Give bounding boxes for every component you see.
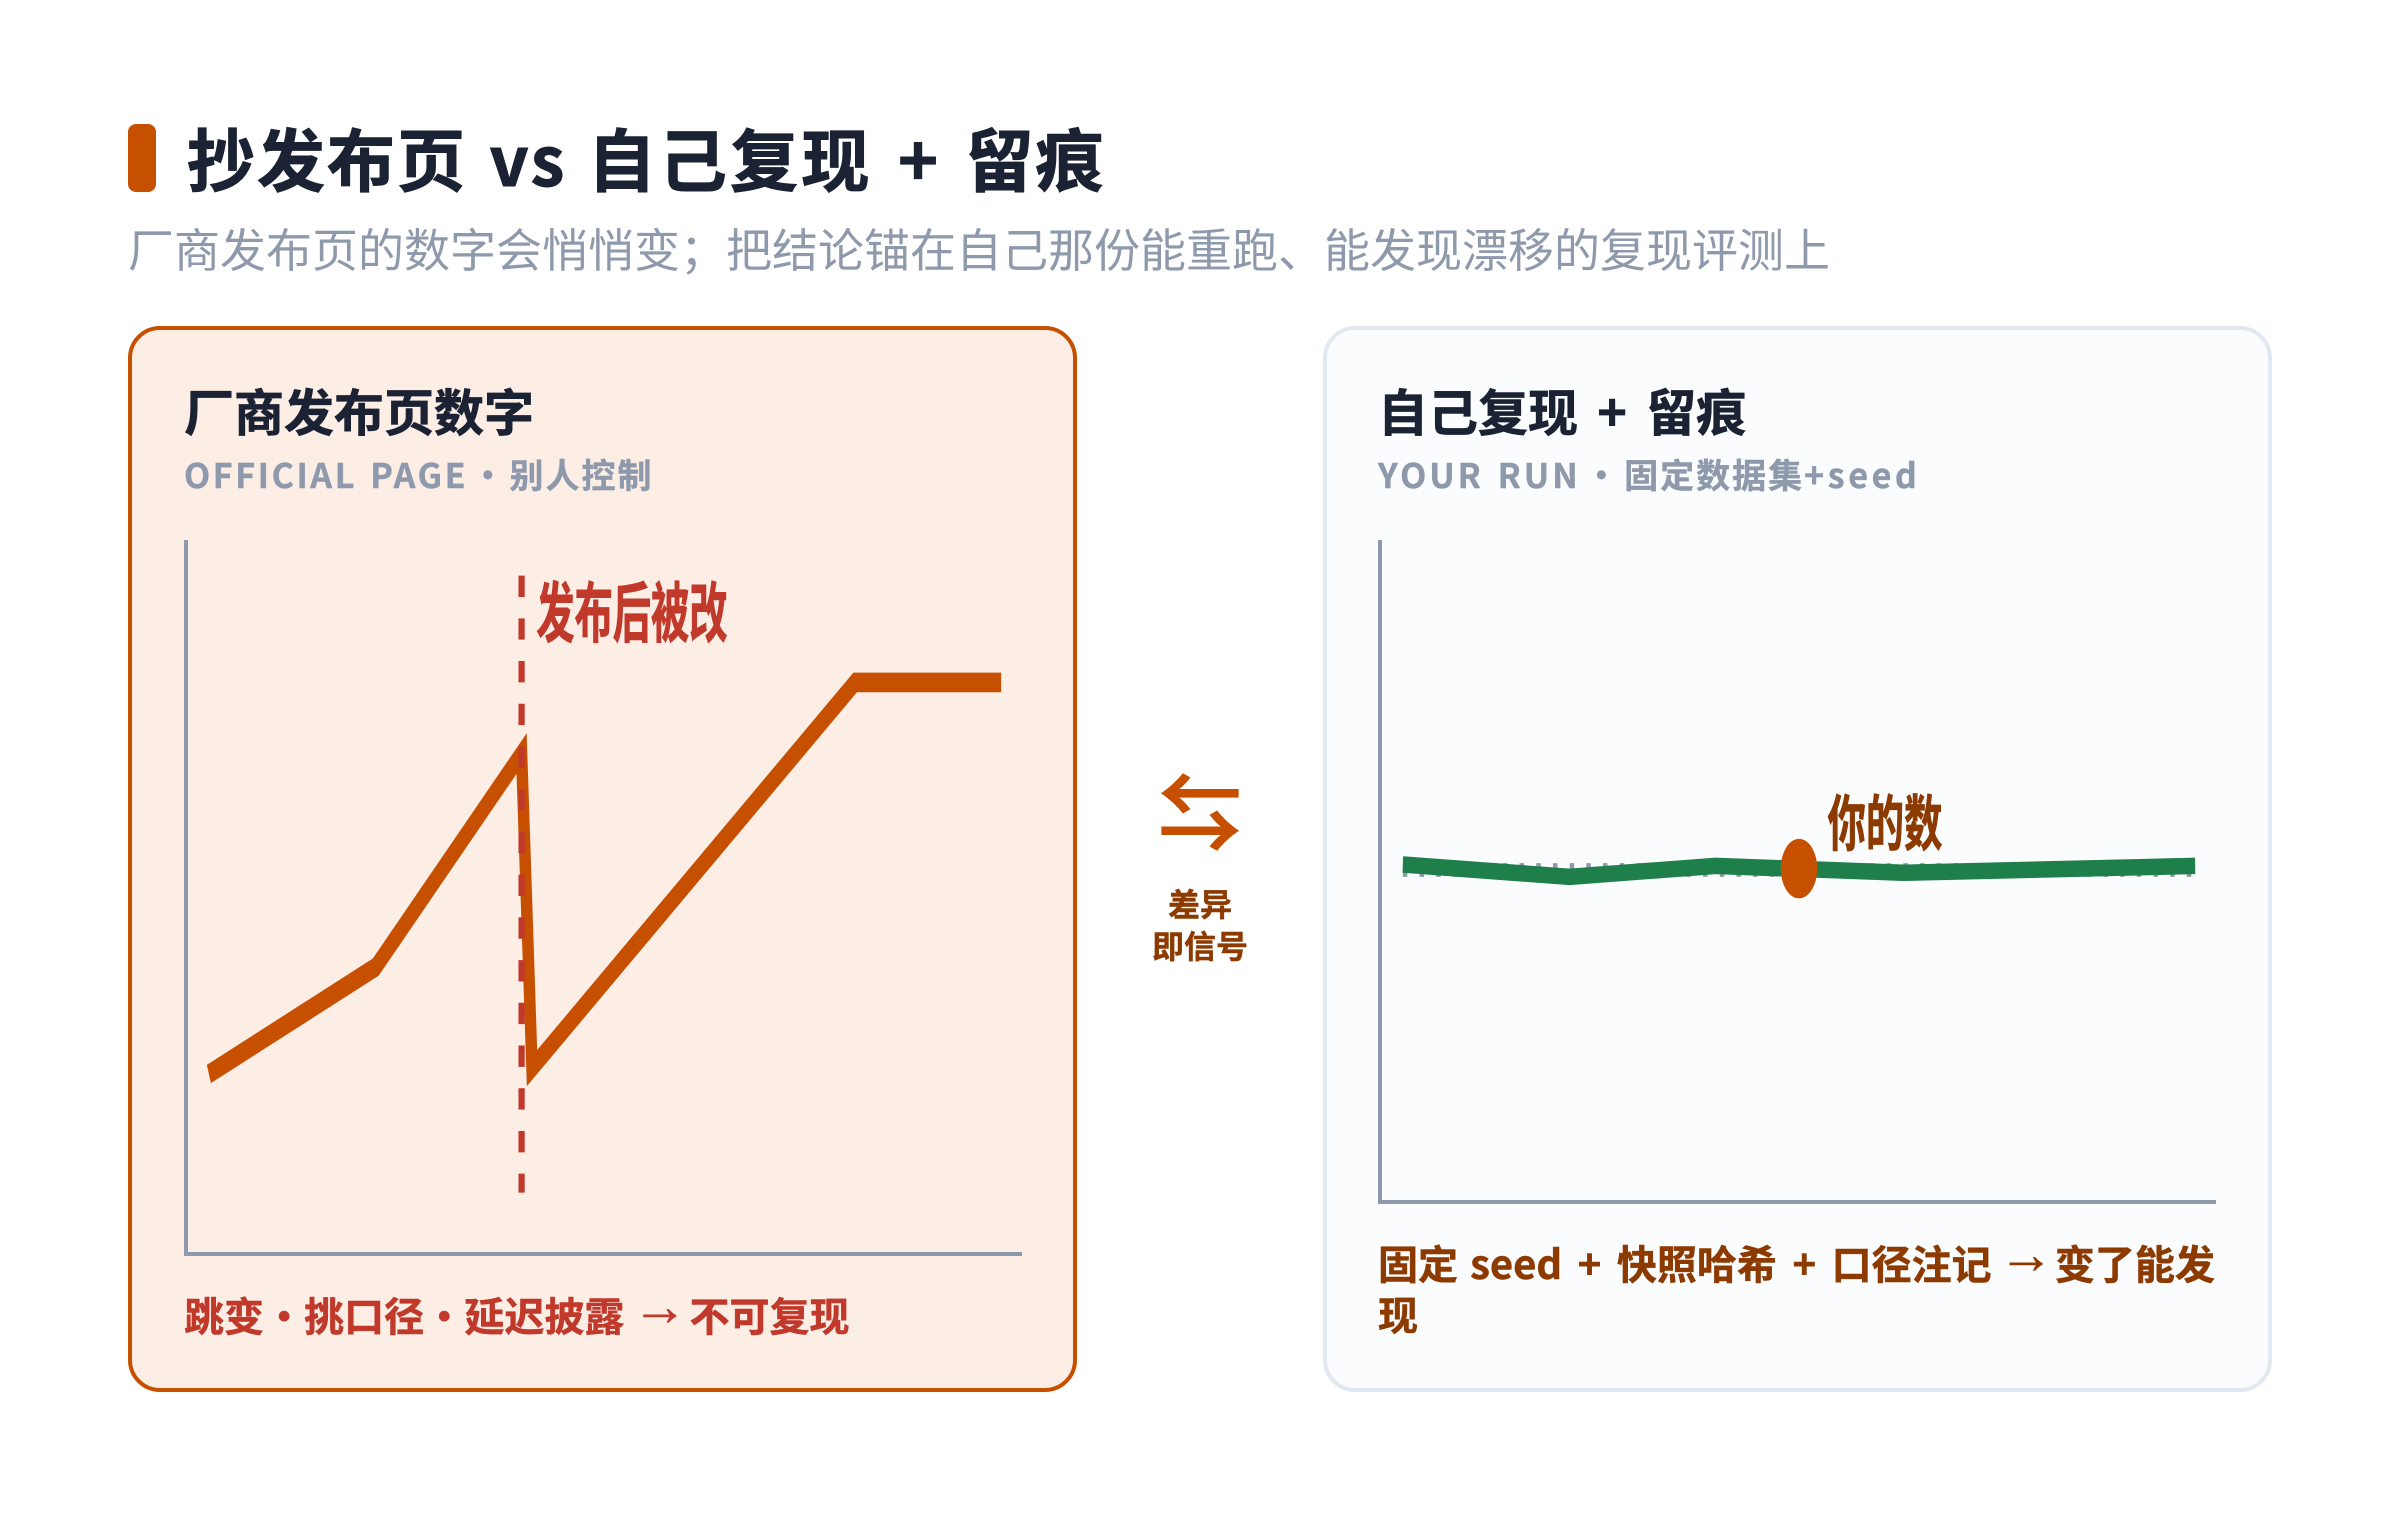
caption: official: 跳变 • 挑口径 • 延迟披露 → 不可复现 [184, 1275, 850, 1343]
label: edited after release: 发布后被改 [536, 562, 727, 656]
panel heading: official: 厂商发布页数字 [184, 374, 534, 446]
caption: own run: 固定 seed + 快照哈希 + 口径注记 → 变了能发 [1378, 1223, 2215, 1291]
line: official numbers [209, 682, 1001, 1074]
baseline: dashed reference [1403, 868, 2195, 872]
subtitle: 厂商发布页的数字会悄悄变；把结论锚在自己那份能重跑、能发现漂移的复现评测上 [128, 215, 1830, 281]
caption: own run [1378, 1223, 2215, 1342]
marker: edit point dashed line [520, 576, 523, 1193]
marker: your number [1781, 839, 1817, 898]
caption: own run: 现 [1378, 1284, 1418, 1342]
label: difference is signal: 差异 [1168, 880, 1232, 926]
panel: official page numbers [128, 326, 1077, 1392]
label: your number: 你的数 [1828, 775, 1942, 863]
label: difference is signal: 即信号 [1152, 922, 1248, 968]
title accent bar [128, 124, 156, 192]
title: 抄发布页 vs 自己复现 + 留痕 [187, 107, 1106, 206]
panel subheading: own run: YOUR RUN • 固定数据集+seed [1378, 449, 1920, 498]
label: difference is signal [1152, 880, 1248, 968]
panel: own reproduction [1323, 326, 2272, 1392]
line: own run numbers [1403, 864, 2195, 877]
panel heading: own run: 自己复现 + 留痕 [1378, 374, 1746, 446]
icon: exchange arrows: ⇆ [1158, 748, 1242, 869]
panel subheading: official: OFFICIAL PAGE • 别人控制 [184, 449, 654, 498]
chart: own run line chart [1378, 540, 2216, 1204]
chart: official page line chart [184, 540, 1022, 1256]
